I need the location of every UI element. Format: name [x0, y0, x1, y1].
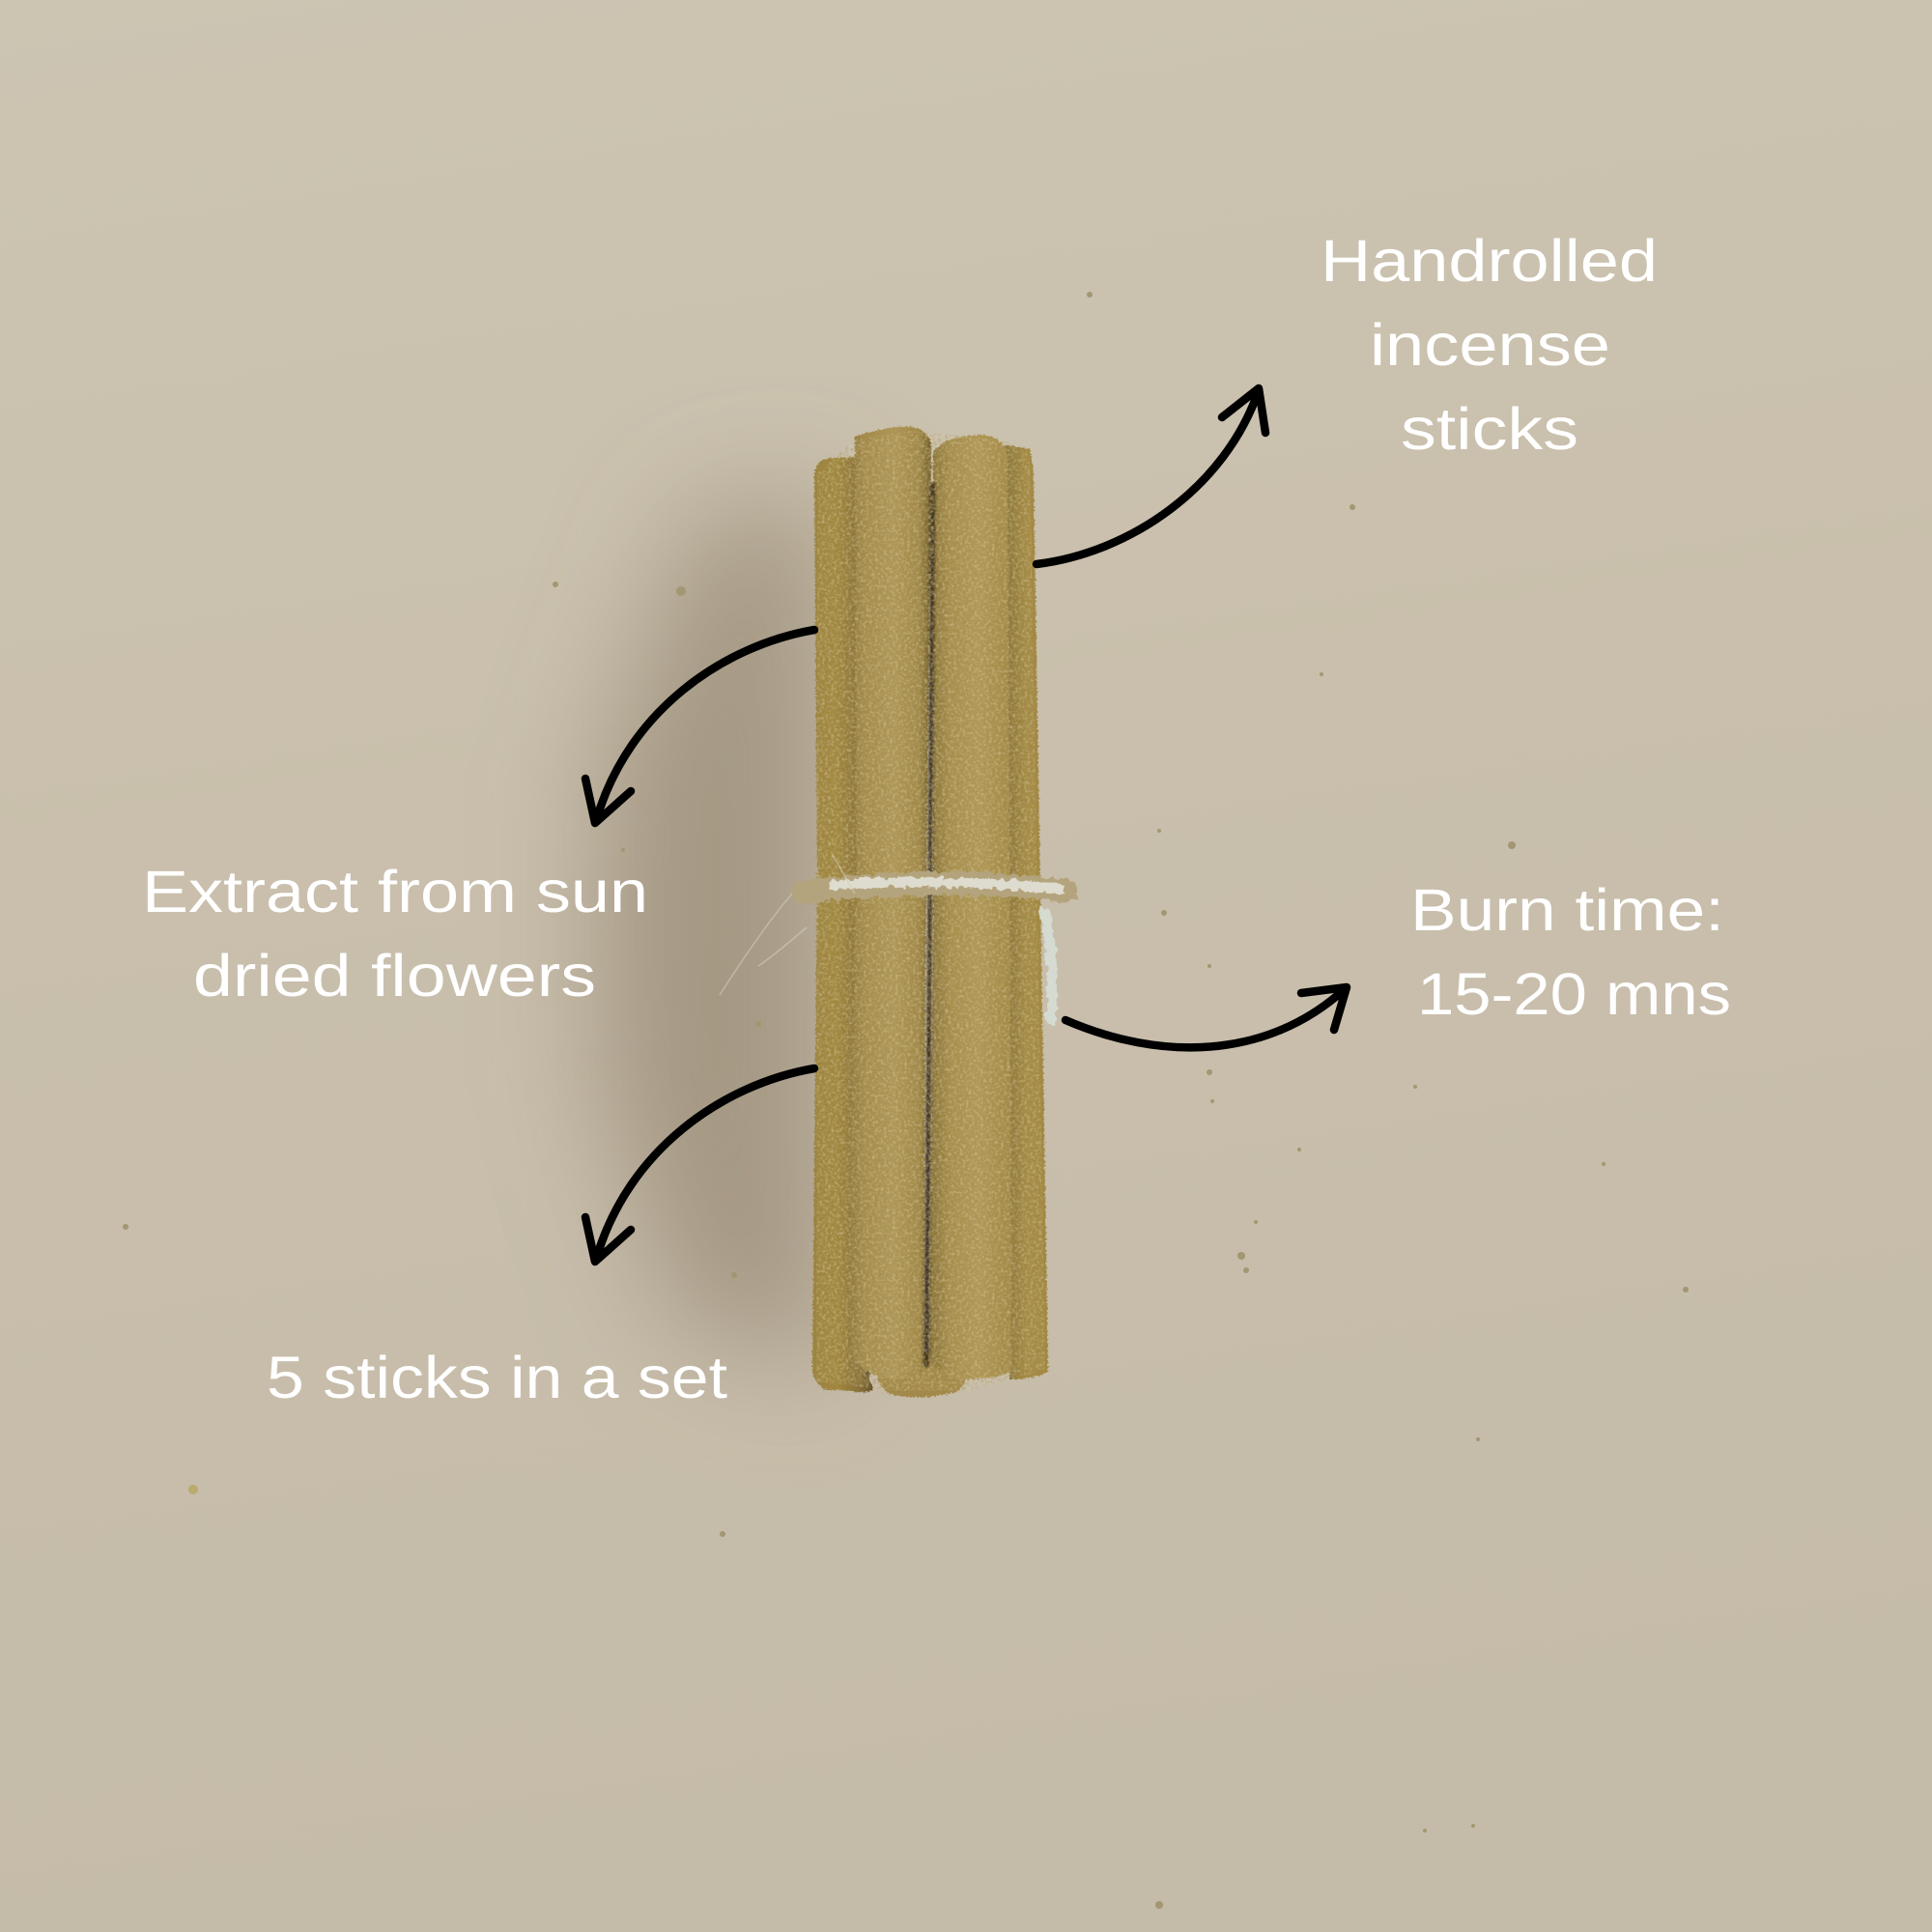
- stick grain texture dark: [816, 431, 1045, 1391]
- dark gap between sticks: [923, 483, 935, 1367]
- label: handrolled incense sticks: Handrolled: [1321, 228, 1658, 294]
- arrow: to flowers label: [585, 630, 814, 823]
- surface specks: [123, 292, 1689, 1909]
- label: burn time: Burn time:: [1410, 877, 1724, 943]
- label: burn time: [1410, 877, 1731, 1027]
- stick: bottom middle: [874, 1352, 967, 1398]
- label: burn time: 15-20 mns: [1417, 961, 1731, 1027]
- label: 5 sticks in a set: 5 sticks in a set: [267, 1345, 727, 1410]
- arrow: to burn time label: [1065, 987, 1347, 1047]
- stick: back right: [1005, 444, 1048, 1379]
- arrow: to sticks count label: [585, 1068, 814, 1262]
- arrow: to handrolled label: [1037, 388, 1265, 564]
- label: handrolled incense sticks: incense: [1370, 312, 1610, 378]
- cast shadow: [599, 493, 831, 1372]
- label: handrolled incense sticks: sticks: [1401, 396, 1578, 462]
- stick grain texture light: [816, 431, 1045, 1391]
- stick: front left: [848, 427, 931, 1379]
- stick: back left: [812, 457, 872, 1392]
- incense stick bundle: [720, 427, 1066, 1398]
- label: handrolled incense sticks: [1321, 228, 1658, 462]
- stick bodies: [812, 427, 1048, 1398]
- label: extract from sun dried flowers: dried flowers: [193, 943, 596, 1009]
- label: extract from sun dried flowers: Extract from sun: [142, 859, 648, 924]
- label: extract from sun dried flowers: [142, 859, 648, 1009]
- twine wrap: [720, 855, 1066, 1019]
- stick: front right: [929, 435, 1011, 1379]
